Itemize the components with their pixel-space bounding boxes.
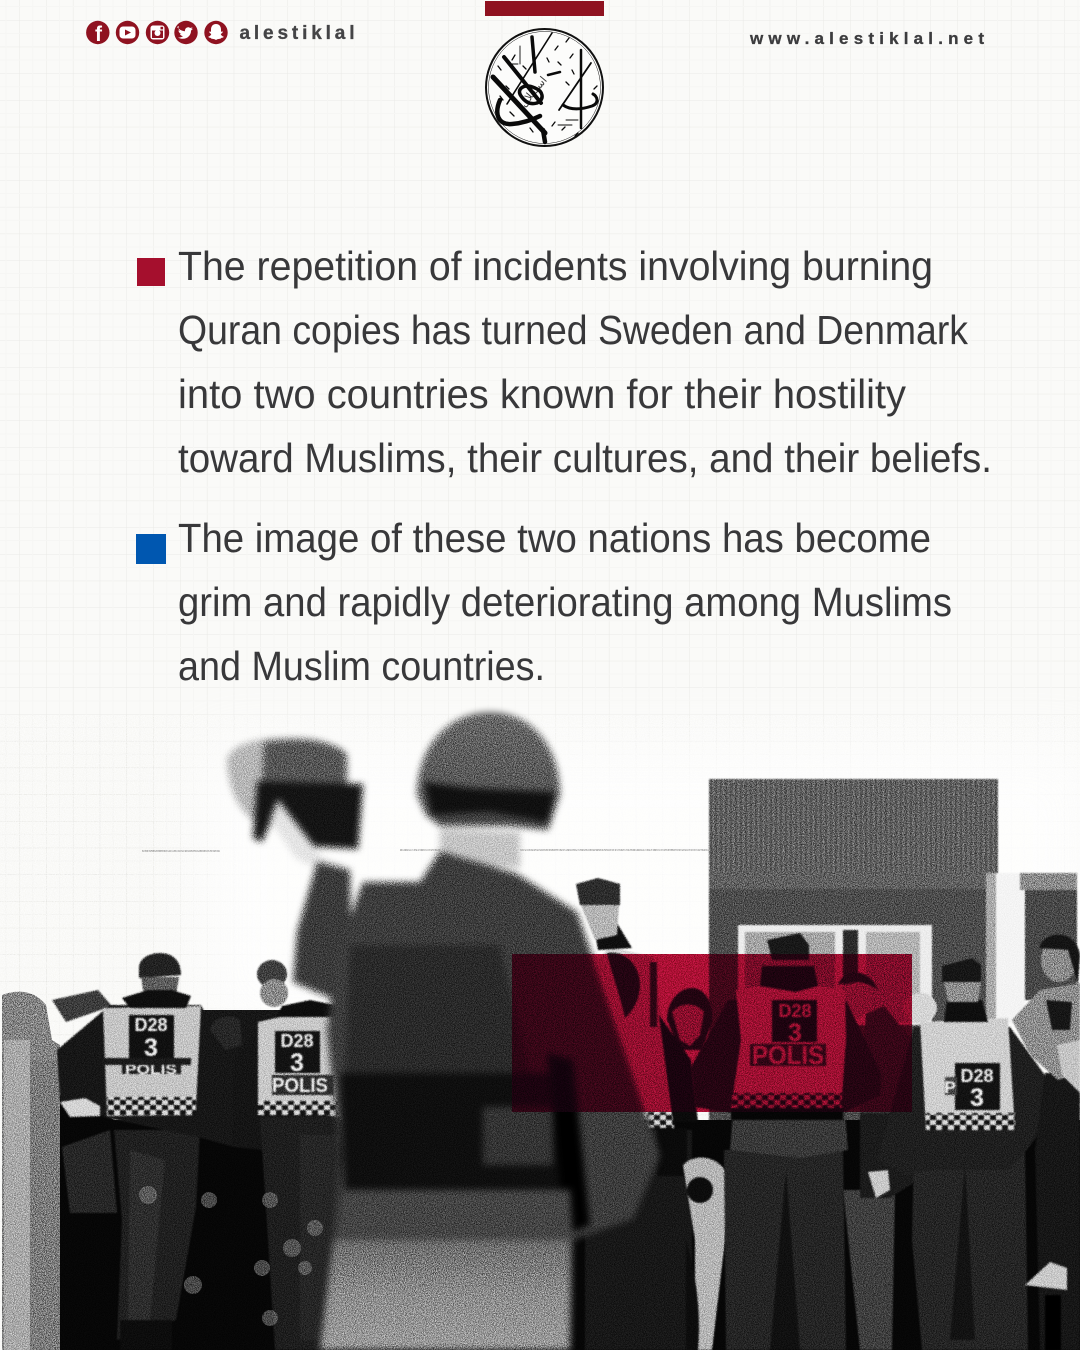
police officer 2: POLIS <box>272 1075 328 1097</box>
trousers <box>320 1240 572 1350</box>
helmet <box>417 712 560 830</box>
bullet: blue square <box>136 534 166 564</box>
police officer 4: 3 <box>970 1084 984 1112</box>
logo: calligraphic roundel: استقلال <box>517 74 550 110</box>
icon: facebook <box>86 21 110 46</box>
police officer 3 with tinted vest: POLIS <box>752 1040 824 1070</box>
woman at right <box>1012 935 1080 1350</box>
bearded man behind <box>838 972 937 1350</box>
logo: calligraphic roundel <box>486 29 603 146</box>
police officer 3 with tinted vest: 3 <box>788 1019 802 1047</box>
police officer 4: D28 <box>960 1066 994 1086</box>
text block: second paragraph: The image of these two nations has become <box>178 515 931 561</box>
neck <box>440 829 520 868</box>
website url: www.alestiklal.net <box>749 29 984 48</box>
top accent bar <box>485 1 604 16</box>
police officer 3 with tinted vest <box>691 933 881 1350</box>
police officer 1: POLIS <box>125 1061 177 1077</box>
police officer 3 with tinted vest: D28 <box>778 1001 812 1021</box>
icon: facebook: f <box>95 23 103 46</box>
police officer 1: D28 <box>134 1015 168 1035</box>
blurred foreground officer <box>227 712 660 1350</box>
concrete post <box>2 992 60 1350</box>
faint horizon line <box>142 850 709 851</box>
police officer 4: P <box>944 1078 956 1097</box>
brand name: alestiklal <box>240 23 354 44</box>
text block: first paragraph: into two countries known for their hostility <box>178 371 906 417</box>
police officer 2: 3 <box>290 1049 304 1077</box>
text block: second paragraph: and Muslim countries. <box>178 643 545 689</box>
police officer 2 <box>210 960 340 1350</box>
police officer 1: 3 <box>144 1034 158 1062</box>
bicycle and helmet <box>683 1157 730 1350</box>
building <box>709 779 1077 1149</box>
raised arm <box>293 862 352 1000</box>
text block: second paragraph: grim and rapidly deteriorating among Muslims <box>178 579 952 625</box>
raised hand holding book <box>227 738 363 870</box>
text block: first paragraph <box>178 243 992 481</box>
icon: instagram <box>146 21 169 44</box>
icon: youtube <box>116 21 139 44</box>
bullet: red square <box>137 258 165 286</box>
bokeh dots <box>139 1186 323 1326</box>
text block: first paragraph: The repetition of incidents involving burning <box>178 243 933 289</box>
icon: twitter <box>174 21 198 44</box>
red overlay panel <box>512 954 912 1112</box>
police officer behind left <box>576 878 692 1350</box>
police officer 2: D28 <box>280 1031 314 1051</box>
text block: first paragraph: Quran copies has turned Sweden and Denmark <box>178 307 968 353</box>
police officer 1 <box>52 953 234 1350</box>
police officer 4 <box>877 958 1063 1350</box>
text block: second paragraph <box>178 515 952 689</box>
social icons <box>86 21 228 46</box>
dark ground mass behind figures <box>60 1095 1080 1350</box>
hooded bystander <box>659 988 712 1122</box>
photo: police scene <box>0 712 1080 1350</box>
jacket <box>327 851 660 1240</box>
film grain texture <box>0 715 1080 1350</box>
icon: snapchat <box>204 21 228 44</box>
text block: first paragraph: toward Muslims, their cultures, and their beliefs. <box>178 435 992 481</box>
